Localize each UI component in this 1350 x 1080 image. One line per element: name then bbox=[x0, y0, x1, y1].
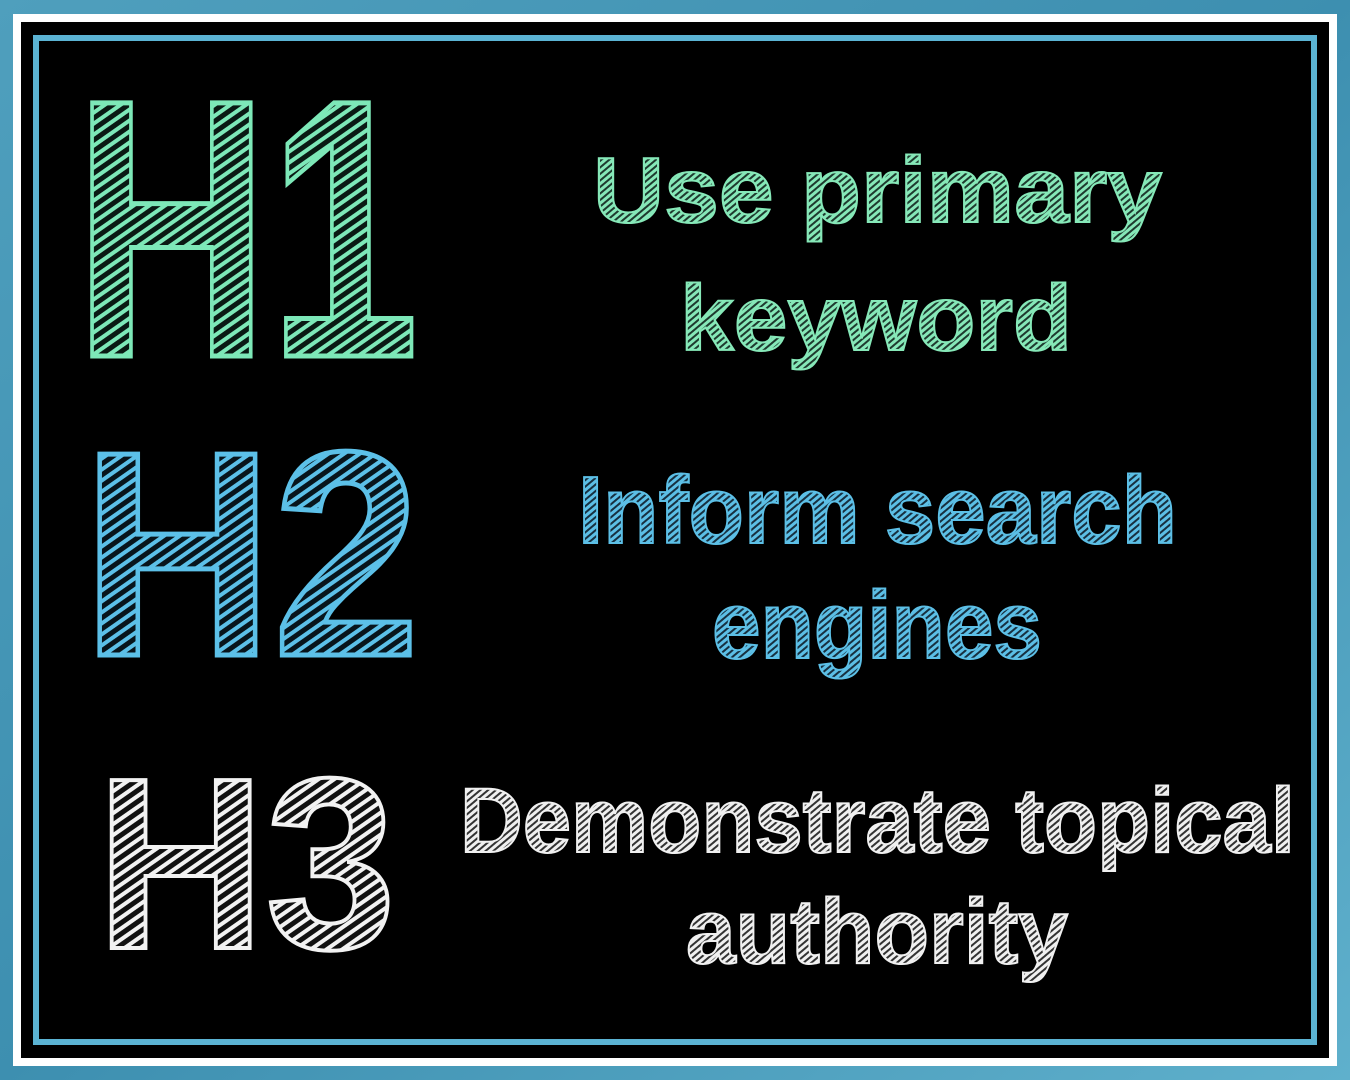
text: H3 description bbox=[460, 770, 1295, 983]
heading: H2: H2 bbox=[82, 391, 420, 717]
heading: H3: H3 bbox=[96, 727, 396, 1000]
text: H1 description: Use primary bbox=[593, 138, 1162, 242]
text: H2 description bbox=[578, 457, 1177, 679]
text: H2 description: engines bbox=[712, 572, 1042, 679]
text: H3 description: Demonstrate topical bbox=[460, 770, 1295, 872]
text: H3 description: authority bbox=[686, 881, 1068, 983]
heading: H1: H1 bbox=[74, 23, 419, 434]
text: H1 description: keyword bbox=[680, 266, 1072, 370]
text: H1 description bbox=[593, 138, 1162, 370]
text: H2 description: Inform search bbox=[578, 457, 1177, 564]
